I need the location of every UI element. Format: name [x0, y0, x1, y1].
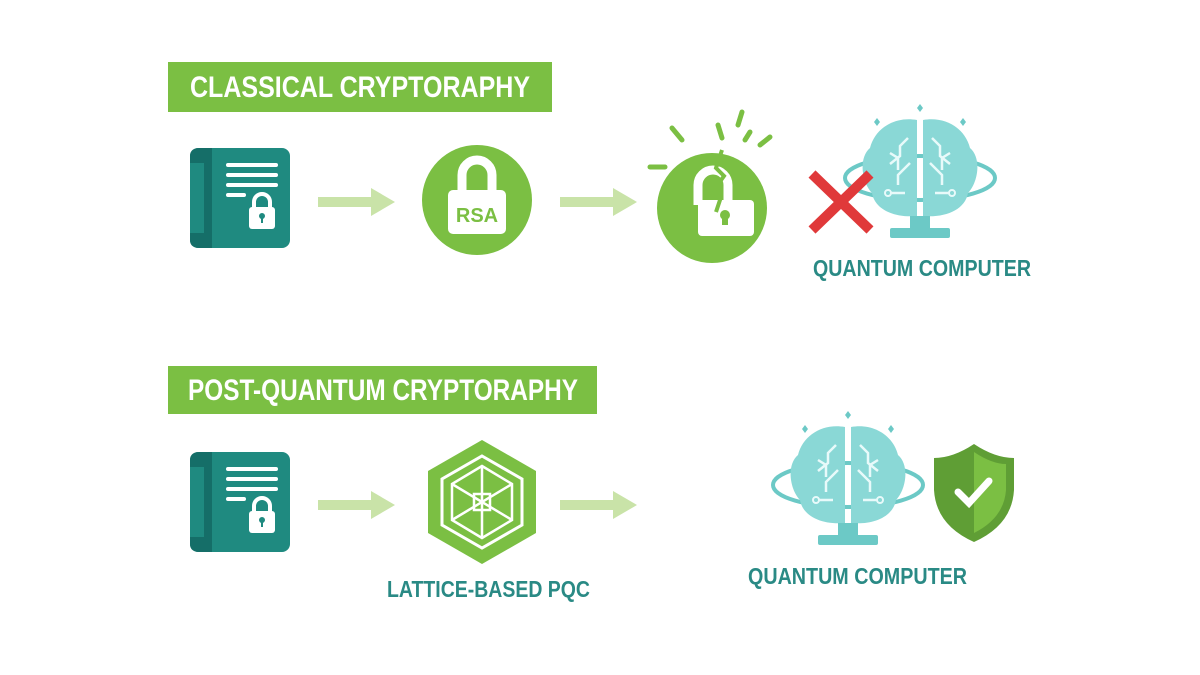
title: post-quantum cryptography: POST-QUANTUM CRYPTORAPHY — [188, 374, 578, 407]
icon: locked document (PQC) — [190, 452, 290, 552]
icon: locked document (classical) — [190, 148, 290, 248]
arrow: RSA to broken lock — [560, 188, 637, 216]
label: quantum computer (classical): QUANTUM COMPUTER — [813, 255, 1031, 281]
arrow: lattice to quantum — [560, 491, 637, 519]
arrow: document to lattice — [318, 491, 395, 519]
title: classical cryptography — [168, 62, 552, 112]
icon: lattice hexagon — [428, 440, 536, 564]
icon: shield with check — [934, 444, 1014, 542]
title: classical cryptography: CLASSICAL CRYPTORAPHY — [190, 71, 530, 104]
icon: quantum computer brain (classical) — [845, 104, 995, 238]
title: post-quantum cryptography — [168, 366, 597, 414]
icon: broken lock — [650, 112, 770, 263]
label: lattice-based PQC: LATTICE-BASED PQC — [387, 576, 590, 602]
icon: RSA lock — [422, 145, 532, 255]
icon: RSA lock: RSA — [456, 205, 498, 227]
icon: quantum computer brain (PQC) — [773, 411, 923, 545]
label: quantum computer (PQC): QUANTUM COMPUTER — [748, 563, 967, 589]
arrow: document to RSA — [318, 188, 395, 216]
icon: red X — [812, 174, 870, 230]
